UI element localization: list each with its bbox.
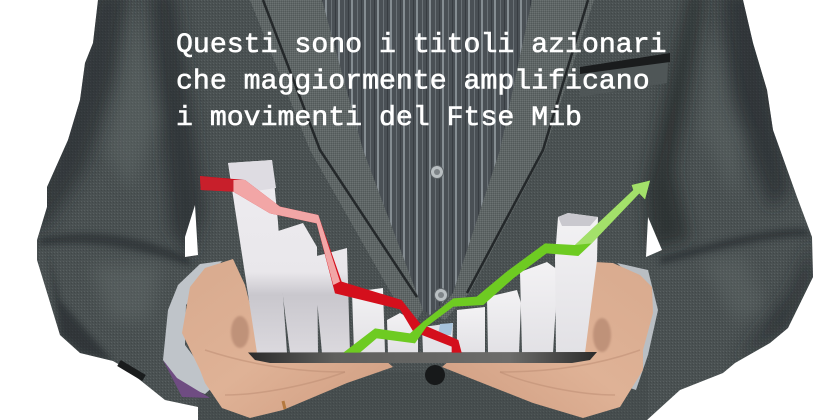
left cuff <box>163 261 222 394</box>
falling red line <box>200 176 462 353</box>
jacket pocket <box>580 53 670 97</box>
cuff buttons <box>119 363 144 378</box>
left hand <box>182 259 393 418</box>
tablet <box>248 352 597 363</box>
title: Questi sono i titoli azionari <box>176 30 667 61</box>
title: che maggiormente amplificano <box>176 66 650 98</box>
purple lining <box>163 360 210 398</box>
title <box>176 30 667 134</box>
right hand <box>442 262 653 418</box>
left lapel <box>250 0 423 320</box>
right cuff <box>617 263 658 390</box>
3D bar chart <box>228 160 598 353</box>
rising green arrow <box>343 181 650 353</box>
title: i movimenti del Ftse Mib <box>176 103 582 134</box>
lapel edges <box>263 0 588 297</box>
right lapel <box>436 0 594 320</box>
shirt buttons <box>425 166 448 385</box>
shirt <box>320 0 532 315</box>
arm gaps <box>185 205 198 257</box>
